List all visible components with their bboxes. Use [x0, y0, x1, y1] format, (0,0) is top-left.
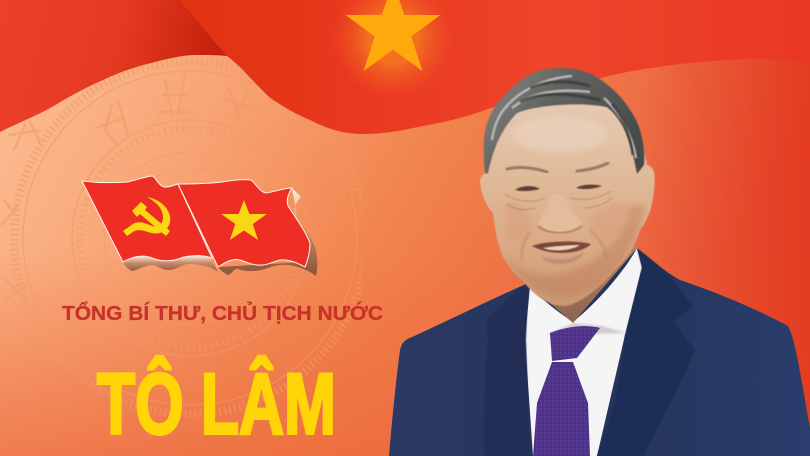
portrait of the man: [389, 68, 810, 456]
icon: small yellow star: [221, 200, 267, 240]
emblem: national flag: [178, 180, 310, 267]
portrait: mouth: [532, 242, 591, 253]
flag: red wave across the top: [0, 0, 810, 134]
emblem: party flag rim: [123, 255, 218, 272]
tie: blade: [533, 362, 590, 456]
portrait: tie: [533, 326, 600, 456]
flag: star glow: [331, 0, 455, 100]
icon: hammer and sickle: [123, 197, 170, 236]
portrait: lower lip: [540, 252, 584, 264]
portrait: neck: [525, 235, 637, 323]
flag: main field: [181, 0, 810, 134]
portrait: right lapel: [597, 248, 695, 456]
tie: knot: [550, 326, 600, 361]
portrait: face: [480, 95, 655, 306]
portrait: eyes: [515, 185, 602, 191]
portrait: nose: [538, 194, 582, 232]
portrait: smile folds: [521, 230, 606, 262]
portrait: hair: [484, 68, 644, 174]
name title: TÔ LÂM: [97, 356, 336, 452]
portrait: suit jacket: [389, 248, 810, 456]
portrait: nose shadow: [538, 226, 582, 233]
portrait: eye wrinkles: [505, 191, 612, 210]
portrait: hair streaks: [492, 76, 636, 158]
portrait: cheek and jaw shading: [503, 205, 645, 297]
portrait: cheeks: [505, 203, 630, 245]
party and national flags emblem: [82, 176, 317, 276]
portrait: teeth: [543, 245, 580, 250]
portrait: forehead highlight: [512, 117, 608, 153]
portrait: collar shadow: [546, 323, 626, 335]
drum figures: [0, 73, 191, 301]
portrait: left lapel: [484, 283, 530, 456]
portrait: eyebrows: [507, 163, 608, 172]
subtitle: TỔNG BÍ THƯ, CHỦ TỊCH NƯỚC: [62, 301, 383, 325]
emblem: national flag rim: [218, 188, 317, 276]
flag: large yellow star: [345, 0, 441, 71]
portrait: shirt: [525, 248, 642, 456]
flag: left fold: [0, 0, 227, 132]
bronze drum pattern: [2, 62, 366, 414]
emblem: party flag: [82, 176, 212, 262]
